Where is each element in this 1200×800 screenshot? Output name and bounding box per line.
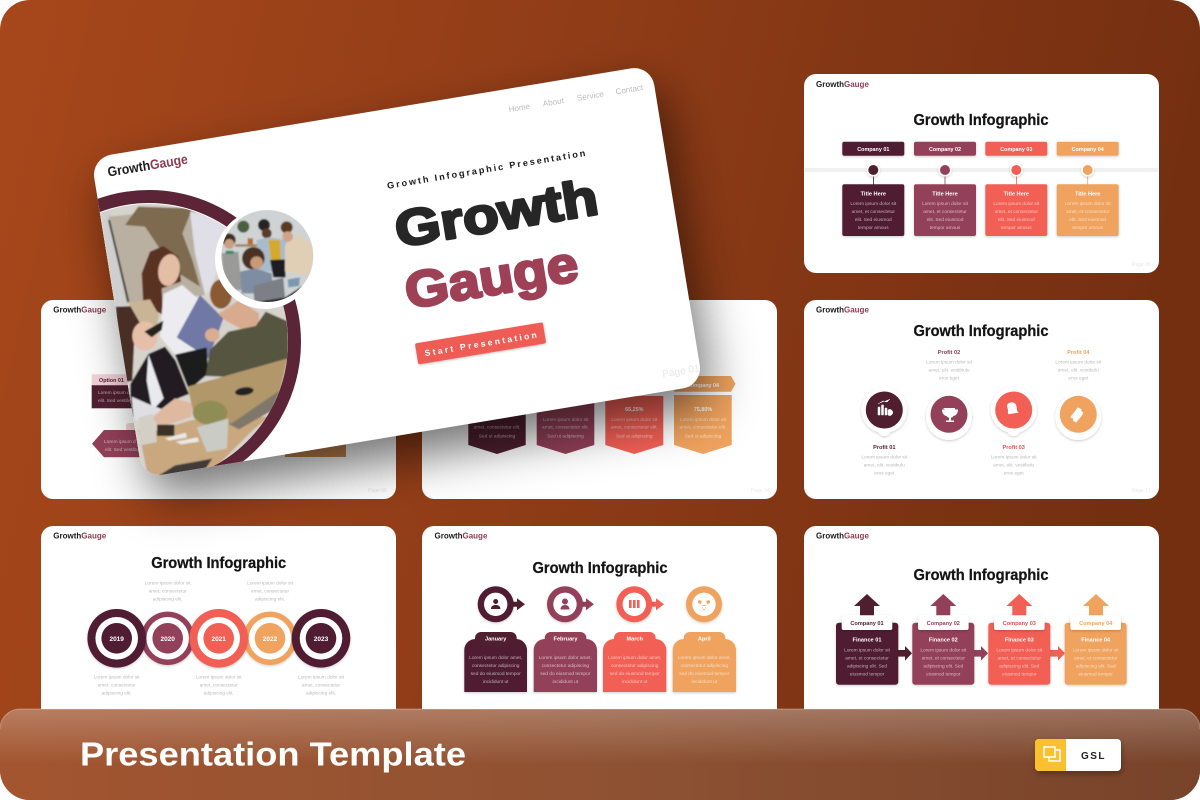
profit 02: Profit 02	[938, 350, 960, 356]
profit 01: Profit 01	[873, 445, 895, 451]
finance 04	[1065, 594, 1127, 685]
company 03 column: Company 03	[1000, 147, 1032, 153]
card 01	[468, 414, 526, 454]
february column: sed do eiusmod tempor	[540, 671, 591, 677]
card 02: amet, consectetur elit.	[542, 424, 589, 430]
finance 02: eiusmod tempor	[926, 672, 961, 678]
page number: Page 05	[1132, 262, 1151, 268]
finance 02: Lorem ipsum dolor sit	[920, 648, 967, 654]
finance 04: adipiscing elit. Sed	[1076, 664, 1116, 670]
company 02 column	[914, 142, 976, 236]
card 01: amet, consectetur elit.	[474, 424, 520, 430]
profit 02: Lorem ipsum dolor sit	[926, 359, 973, 365]
logo: GrowthGauge	[53, 532, 107, 540]
card 04	[674, 376, 736, 454]
company 01 column: tempor amous	[858, 225, 889, 231]
option 02: elit. Sed vestibu	[105, 447, 139, 453]
caption 2019: adipiscing elit.	[102, 690, 132, 696]
icon: trophy	[942, 408, 958, 422]
company 02 column: elit. Sed eiusmod	[927, 217, 964, 223]
company 02 column: Title Here	[932, 192, 958, 198]
ring 2020: 2020	[160, 636, 175, 643]
ring 2021: 2021	[211, 636, 226, 643]
finance 03: adipiscing elit. Sed	[999, 664, 1040, 670]
icon: profile	[560, 598, 570, 610]
slide: options (mostly hidden)	[41, 300, 396, 499]
finance 04: Lorem ipsum dolor sit	[1073, 648, 1119, 654]
icon: person	[491, 599, 500, 609]
option 01: Option 01	[99, 378, 124, 384]
card 03: Sed ut adipiscing	[616, 433, 653, 439]
title: Growth Infographic	[151, 555, 287, 572]
icon: bar chart	[878, 399, 893, 415]
card 01: Sed ut adipiscing	[479, 433, 516, 439]
finance 03: Finance 03	[1005, 638, 1034, 644]
finance 02: Company 02	[927, 621, 960, 627]
company 02 column: amet, et consectetur	[923, 209, 967, 215]
profit 01	[861, 387, 908, 476]
company 01 column: amet, et consectetur	[852, 209, 895, 215]
company 02 column: tempor amous	[930, 225, 961, 231]
company 04 column: Lorem ipsum dolor sit	[1065, 201, 1111, 207]
page number: Page 06	[368, 488, 387, 494]
main slide: cover	[4, 65, 703, 487]
title: Growth Infographic	[914, 112, 1049, 129]
company 03 column: tempor amous	[1001, 225, 1032, 231]
company 01 column	[842, 142, 904, 236]
company 04 column: tempor amous	[1072, 225, 1104, 231]
title: Growth Infographic	[532, 560, 668, 577]
card 02: Sed ut adipiscing	[547, 433, 584, 439]
logo: GrowthGauge	[53, 306, 107, 314]
company 04 column: Company 04	[1072, 147, 1104, 153]
february column: Lorem ipsum dolor amet,	[539, 655, 592, 661]
february column: February	[554, 636, 578, 642]
option 02	[92, 423, 140, 458]
card 03: 65,25%	[625, 407, 644, 413]
photo: team at laptop	[92, 190, 318, 483]
caption 2021: Lorem ipsum dolor sit	[196, 674, 242, 680]
caption 2019: amet, consectetur	[98, 682, 136, 688]
april column: consectetur adipiscing	[681, 663, 728, 669]
start button: Start Presentation	[424, 330, 537, 358]
caption 2020: amet, consectetur	[149, 588, 187, 594]
profit 01: amet, elit. vestibulu	[864, 462, 905, 468]
finance 01	[836, 594, 912, 685]
company 04 column: amet, et consectetur	[1066, 209, 1110, 215]
icon: bell	[1007, 402, 1019, 414]
start button	[415, 322, 546, 365]
card 04: Lorem ipsum dolor sit	[680, 417, 727, 423]
february column: consectetur adipiscing	[542, 663, 589, 669]
logo: GrowthGauge	[816, 80, 869, 89]
page number: Page 01	[661, 363, 701, 380]
slide: year rings	[41, 526, 396, 726]
company 03 column	[985, 142, 1047, 236]
profit 04: Lorem ipsum dolor sit	[1055, 359, 1102, 365]
profit 04: eros eget	[1068, 375, 1089, 381]
finance 03: eiusmod tempor	[1002, 672, 1037, 678]
icon: group	[697, 600, 711, 611]
caption 2021: adipiscing elit.	[204, 690, 234, 696]
march column: sed do eiusmod tempor	[610, 671, 660, 677]
company 02 column: Lorem ipsum dolor sit	[922, 201, 969, 207]
slide: months	[422, 526, 777, 726]
card 04: 75,80%	[694, 407, 712, 413]
icon: team	[629, 600, 640, 608]
option 01: elit. Sed vestibu	[98, 398, 132, 404]
caption 2022: Lorem ipsum dolor sit	[247, 580, 294, 586]
january column: incididunt ut	[483, 679, 509, 685]
february column	[534, 586, 597, 692]
profit 03: amet, elit. vestibulu	[993, 462, 1035, 468]
ring 2021	[189, 609, 248, 668]
page number: Page 34	[751, 488, 770, 494]
main slide shadow	[101, 87, 713, 500]
slide: profit circles	[804, 300, 1159, 499]
finance 04: Finance 04	[1081, 638, 1111, 644]
january column: consectetur adipiscing	[472, 663, 520, 669]
finance 03: Company 03	[1003, 621, 1036, 627]
caption 2023: Lorem ipsum dolor sit	[298, 674, 345, 680]
card 02	[536, 403, 594, 454]
march column: incididunt ut	[622, 679, 648, 685]
finance 02: Finance 02	[929, 638, 958, 644]
icon: ticket	[1071, 408, 1082, 422]
finance 01: adipiscing elit. Sed	[847, 664, 887, 670]
caption 2020: Lorem ipsum dolor sit	[145, 580, 191, 586]
company 01 column: elit. Sed eiusmod	[855, 217, 892, 223]
finance 03: amet, et consectetur	[998, 656, 1041, 662]
title: Growth Infographic	[914, 567, 1049, 584]
option 02: Lorem ipsum d	[104, 439, 136, 445]
icon: slides	[1044, 747, 1060, 761]
logo: GrowthGauge	[816, 532, 869, 540]
finance 01: Finance 01	[853, 638, 881, 644]
small circle photo	[215, 208, 318, 309]
january column	[464, 586, 527, 692]
dark ring	[4, 196, 294, 488]
profit 03: eros eget	[1004, 470, 1024, 476]
logo: GrowthGauge	[816, 306, 869, 314]
option 04 card corner	[285, 444, 346, 457]
finance 01: Lorem ipsum dolor sit	[844, 648, 891, 654]
company 04 column: Title Here	[1075, 192, 1100, 198]
finance 04: eiusmod tempor	[1078, 672, 1113, 678]
january column: sed do eiusmod tempor	[471, 671, 521, 677]
caption 2022: amet, consectetur	[251, 588, 289, 594]
january column: Lorem ipsum dolor amet,	[469, 655, 522, 661]
finance 03	[988, 594, 1065, 685]
company 02 column: Company 02	[929, 147, 961, 153]
bottom banner	[0, 709, 1200, 800]
title: Growth Infographic	[914, 323, 1049, 340]
option 01: Lorem ipsum d	[98, 390, 130, 396]
april column: April	[698, 636, 711, 642]
finance 03: Lorem ipsum dolor sit	[996, 648, 1043, 654]
ring 2023	[292, 609, 350, 668]
profit 03: Profit 03	[1003, 445, 1025, 451]
logo: GrowthGauge	[106, 151, 189, 180]
option 01	[92, 374, 132, 408]
caption 2020: adipiscing elit.	[153, 596, 183, 602]
finance 02: amet, et consectetur	[922, 656, 965, 662]
company 01 column: Company 01	[857, 147, 889, 153]
march column: consectetur adipiscing	[611, 663, 659, 669]
january column: January	[485, 636, 507, 642]
headline growth: Growth	[391, 168, 602, 258]
ring 2020	[141, 612, 194, 665]
april column: Lorem ipsum dolor amet,	[678, 655, 731, 661]
finance 04: Company 04	[1079, 621, 1113, 627]
profit 02	[926, 350, 973, 440]
profit 02: eros eget	[939, 375, 960, 381]
card 04: Sed ut adipiscing	[685, 433, 722, 439]
navigation: Contact	[615, 83, 645, 96]
slide: percent tags (mostly hidden)	[422, 300, 777, 499]
navigation: About	[542, 96, 565, 109]
company 04 column	[1057, 142, 1119, 236]
cover text group	[106, 74, 701, 465]
card 03: amet, consectetur elit.	[611, 424, 658, 430]
profit 04	[1055, 350, 1102, 440]
caption 2023: amet, consectetur	[302, 682, 340, 688]
card 04: amet, consectetur elit.	[680, 424, 726, 430]
february column: incididunt ut	[552, 679, 579, 685]
card 03	[605, 396, 663, 454]
slide: company timeline	[804, 74, 1159, 273]
company 03 column: amet, et consectetur	[995, 209, 1038, 215]
navigation: Home	[508, 102, 531, 114]
banner title: Presentation Template	[80, 736, 466, 772]
company 01 column: Title Here	[861, 192, 886, 198]
profit 03: Lorem ipsum dolor sit	[991, 454, 1037, 460]
caption 2023: adipiscing elit.	[306, 690, 336, 696]
company 03 column: Title Here	[1004, 192, 1029, 198]
finance 01: amet, et consectetur	[845, 656, 889, 662]
finance 04: amet, et consectetur	[1074, 656, 1118, 662]
card 02: Lorem ipsum dolor sit	[543, 417, 589, 423]
caption 2019: Lorem ipsum dolor sit	[94, 674, 140, 680]
slide: finance arrows	[804, 526, 1159, 726]
profit 04: Profit 04	[1067, 350, 1090, 356]
ring 2019: 2019	[109, 636, 124, 643]
march column	[603, 586, 666, 692]
profit 02: amet, elit. vestibulu	[928, 367, 970, 373]
caption 2021: amet, consectetur	[200, 682, 238, 688]
april column	[673, 586, 736, 692]
ring 2023: 2023	[314, 636, 329, 643]
finance 02: adipiscing elit. Sed	[923, 664, 964, 670]
navigation: Service	[576, 89, 605, 103]
profit 01: Lorem ipsum dolor sit	[861, 454, 908, 460]
page number: Page 17	[1132, 488, 1151, 494]
profit 03	[991, 387, 1037, 476]
finance 02	[912, 594, 988, 685]
navigation	[508, 83, 645, 114]
profit 01: eros eget	[874, 470, 895, 476]
company 03 column: elit. Sed eiusmod	[998, 217, 1035, 223]
april column: incididunt ut	[691, 679, 718, 685]
card 03: Lorem ipsum dolor sit	[611, 417, 658, 423]
company 04 column: elit. Sed eiusmod	[1069, 217, 1106, 223]
finance 01: eiusmod tempor	[850, 672, 885, 678]
badge: google slides	[1035, 739, 1121, 771]
subheading: Growth Infographic Presentation	[386, 148, 586, 191]
company 01 column: Lorem ipsum dolor sit	[850, 201, 897, 207]
april column: sed do eiusmod tempor	[679, 671, 730, 677]
logo: GrowthGauge	[434, 532, 488, 540]
ring 2022	[243, 612, 297, 665]
march column: March	[626, 636, 644, 642]
ring 2022: 2022	[263, 636, 278, 643]
caption 2022: adipiscing elit.	[255, 596, 285, 602]
card 04: Company 04	[687, 383, 719, 389]
finance 01: Company 01	[850, 621, 884, 627]
headline gauge: Gauge	[401, 235, 582, 320]
badge: google slides: GSL	[1081, 751, 1106, 762]
profit 04: amet, elit. vestibulu	[1058, 367, 1099, 373]
march column: Lorem ipsum dolor amet,	[608, 655, 661, 661]
ring 2019	[87, 609, 146, 668]
company 03 column: Lorem ipsum dolor sit	[993, 201, 1040, 207]
